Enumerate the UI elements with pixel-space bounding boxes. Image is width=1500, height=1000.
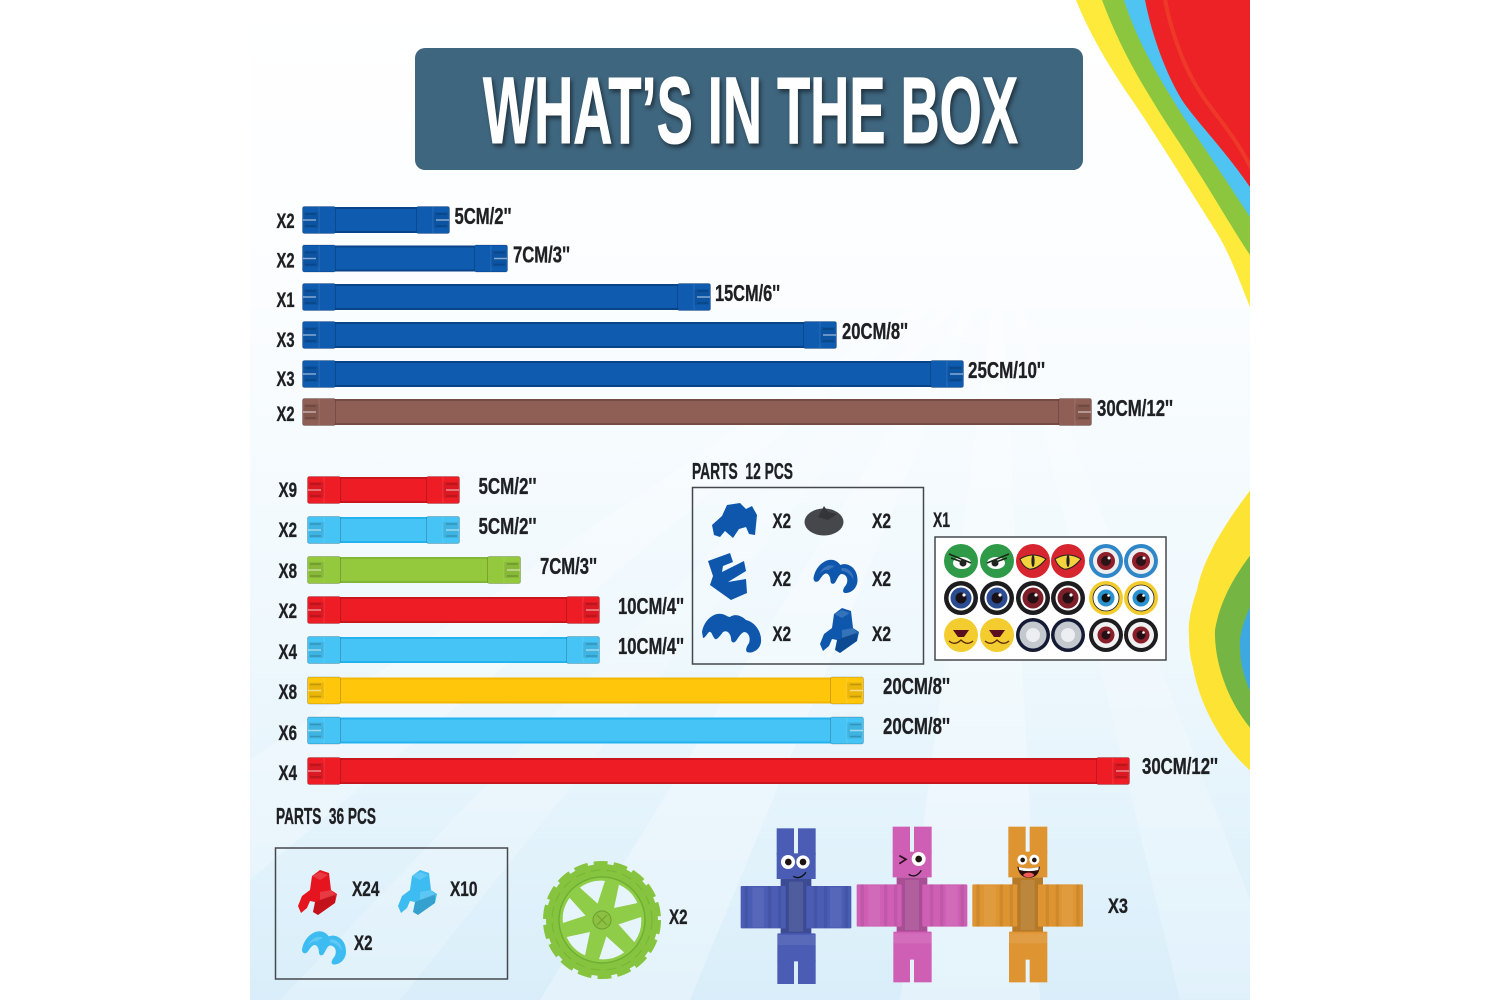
rod quantities and lengths: 30CM/12'' [1097,395,1173,421]
quantity labels: X10 [450,878,478,901]
icon: light blue block [398,870,437,915]
quantity labels: X2 [772,623,791,646]
quantity labels [352,878,478,955]
label: X1: X1 [933,509,950,532]
icon: green wheel [545,863,659,977]
coloured rod quantities and lengths: X6 [278,722,297,745]
rod quantities and lengths: X2 [276,403,294,426]
icon: blue tall block [708,553,747,600]
rod quantities and lengths: X2 [276,250,294,272]
coloured rod quantities and lengths: X9 [278,479,297,502]
coloured rod quantities and lengths [278,473,1218,785]
figures [741,827,1083,984]
icon: blue block part [712,503,757,538]
title: WHAT’S IN THE BOX [483,58,1018,164]
figure: blue [741,828,851,984]
quantity labels: X2 [354,932,372,955]
quantity labels: X2 [872,568,891,591]
icon: light blue clip [302,931,346,964]
coloured rod quantities and lengths: X4 [278,641,297,664]
coloured rod quantities and lengths: X8 [278,681,297,704]
figure: pink [857,827,967,982]
quantity labels: X24 [352,878,380,901]
rod quantities and lengths: X3 [276,329,294,352]
quantity labels: X2 [872,510,891,533]
coloured rod quantities and lengths: X8 [278,560,297,583]
label: figures quantity: X3 [1108,895,1128,918]
icon: blue double clip [814,560,858,593]
icon: red block [298,870,337,915]
bars: blue and brown rods [302,206,1092,426]
quantity labels: X2 [872,623,891,646]
panel: 12 parts [692,488,924,664]
rod quantities and lengths: X1 [276,289,295,312]
coloured rod quantities and lengths: 20CM/8'' [883,673,950,699]
rod quantities and lengths: 15CM/6'' [715,280,780,306]
label: wheel quantity: X2 [669,906,688,929]
bars: coloured rods [308,476,1130,784]
icon: blue clip block [820,608,859,653]
background panel [250,0,1250,1000]
rod quantities and lengths: X3 [276,368,294,391]
coloured rod quantities and lengths: 10CM/4'' [618,633,684,659]
rod quantities and lengths: 25CM/10'' [968,357,1045,383]
coloured rod quantities and lengths: X2 [278,600,297,623]
heading: parts 12 pcs: PARTS 12 PCS [692,458,793,484]
coloured rod quantities and lengths: 7CM/3'' [540,553,597,579]
rod quantities and lengths: X2 [276,210,294,233]
swoosh: lower right rainbow [1189,488,1252,772]
panel: eye stickers [935,537,1166,660]
coloured rod quantities and lengths: X2 [278,519,297,542]
rod quantities and lengths: 20CM/8'' [842,318,908,344]
coloured rod quantities and lengths: 5CM/2'' [478,473,536,499]
coloured rod quantities and lengths: X4 [278,762,297,785]
panel: 36 parts [276,848,508,979]
coloured rod quantities and lengths: 5CM/2'' [478,513,536,539]
rod quantities and lengths: 5CM/2'' [454,203,512,229]
quantity labels [772,510,891,646]
swoosh: top right rainbow [1076,0,1252,312]
coloured rod quantities and lengths: 20CM/8'' [883,713,950,739]
figure: orange [972,827,1083,982]
light rays [540,834,1040,1000]
rod quantities and lengths [276,203,1173,426]
quantity labels: X2 [772,568,791,591]
quantity labels: X2 [772,510,791,533]
title banner [415,48,1083,170]
icon: grey knob [804,506,844,536]
rod quantities and lengths: 7CM/3'' [513,242,570,268]
coloured rod quantities and lengths: 10CM/4'' [618,593,684,619]
heading: parts 36 pcs: PARTS 36 PCS [276,803,376,829]
coloured rod quantities and lengths: 30CM/12'' [1142,753,1218,779]
icon: blue triple clip [702,614,761,653]
